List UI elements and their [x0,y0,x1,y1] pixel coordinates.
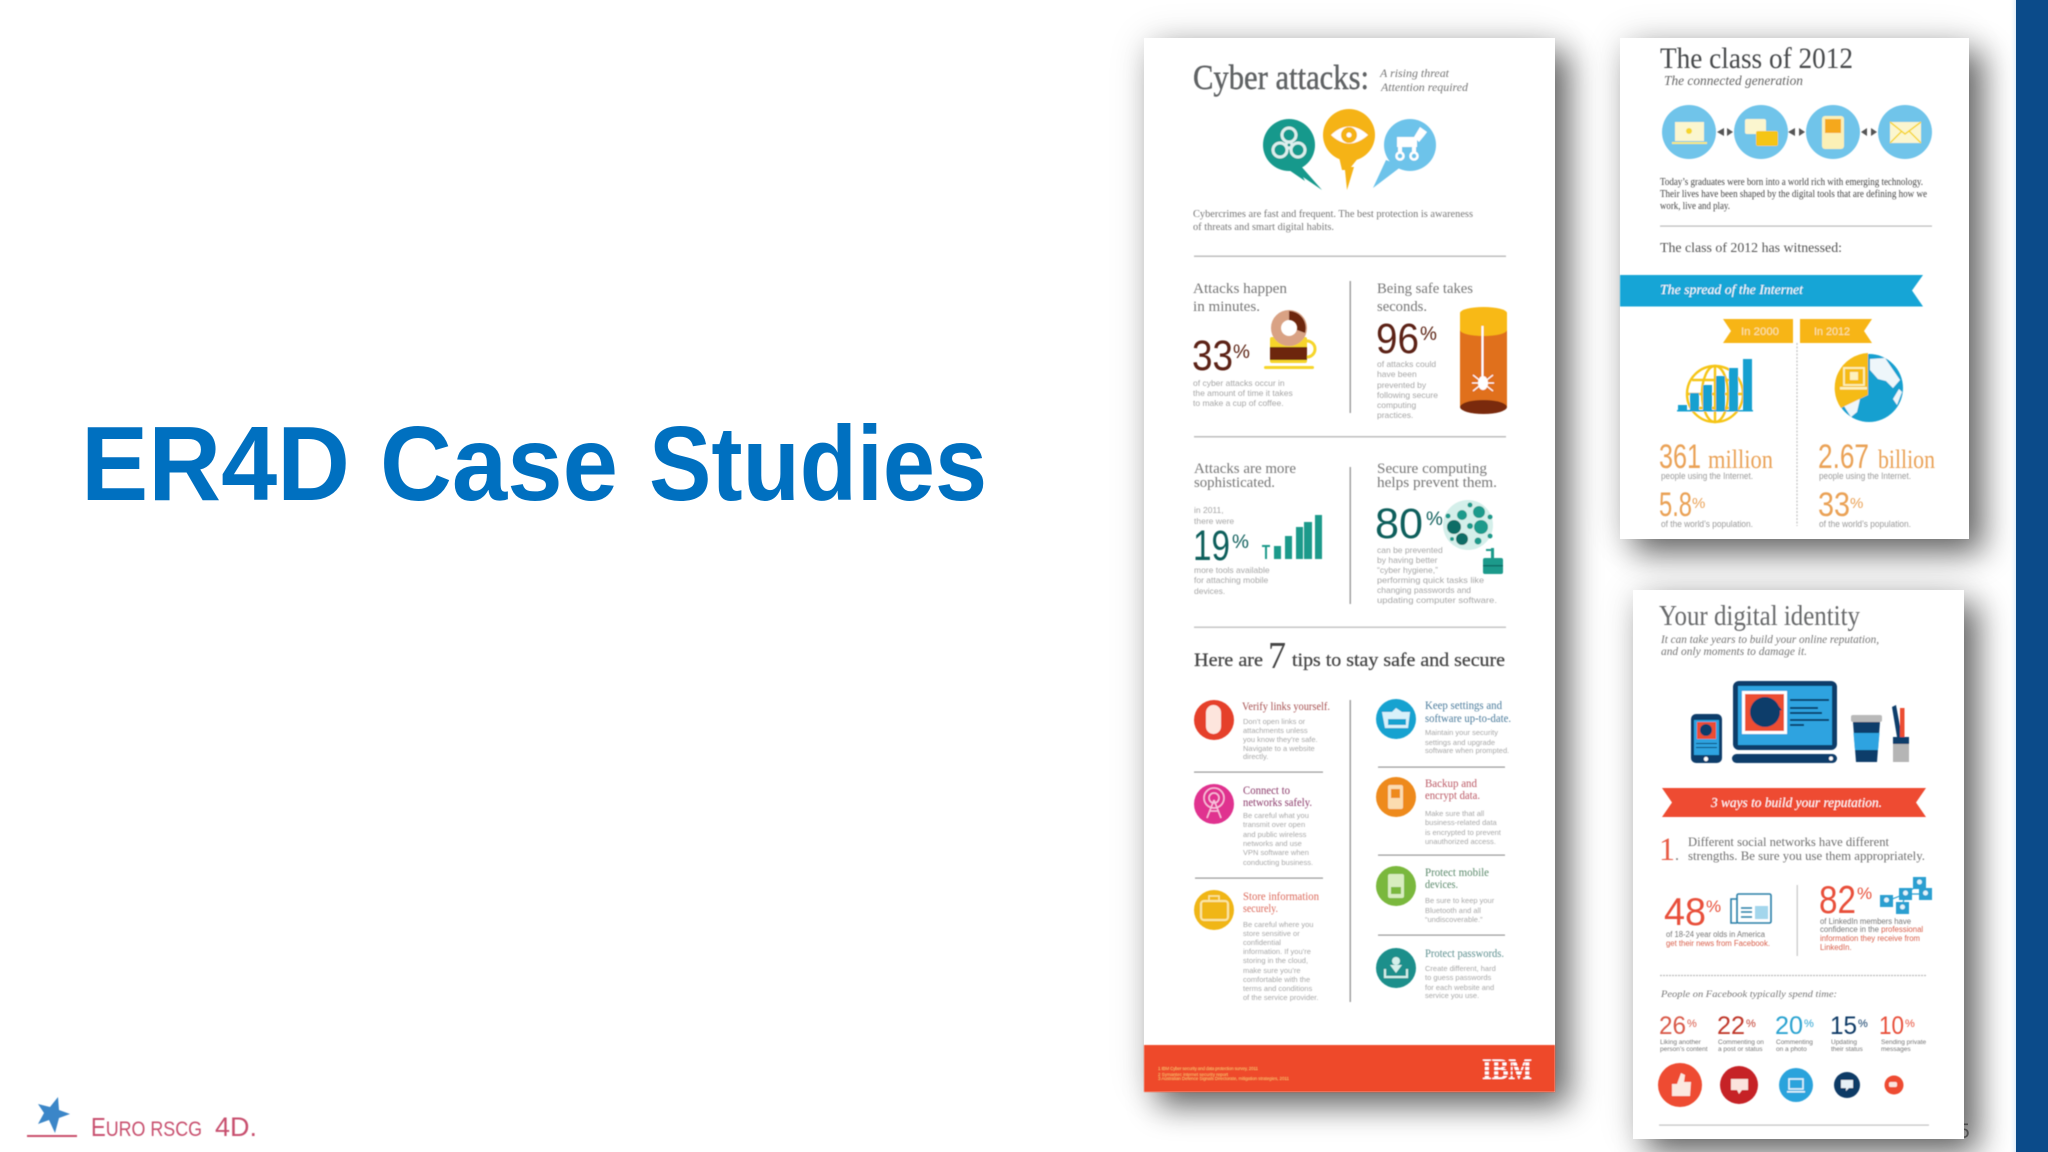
tip: keep settings: software up-to-date. [1425,713,1511,725]
stat: secure computing: changing passwords and [1377,585,1471,595]
subheading: The connected generation [1664,73,1803,88]
icon: globe with bars [1677,359,1753,422]
logo: IBM: IBM [1482,1053,1532,1086]
text: step 1: 1 [1659,832,1675,868]
intro text [1660,177,1927,212]
flag: in 2012: In 2012 [1814,326,1850,338]
text: step 1: . [1675,847,1679,864]
subheading: and only moments to damage it. [1661,646,1807,658]
illustration: devices [1691,681,1909,763]
icon: laptop [1732,681,1837,763]
stat: 361 million: million [1708,445,1773,474]
stat: attacks happen in minutes: the amount of time it takes [1193,388,1293,398]
stat: 2.67 billion [1818,438,1935,529]
tip: store information: storing in the cloud, [1243,956,1308,965]
stat: attacks happen in minutes: 33 [1192,332,1233,380]
stat: 15% updating: % [1858,1018,1868,1030]
tip: verify links: Don’t open links or [1243,717,1306,726]
tip: backup data: unauthorized access. [1425,837,1496,846]
tip: backup data: Backup and [1425,778,1477,790]
heading: seven tips: Here are [1194,650,1263,671]
tip: protect passwords [1376,948,1504,1000]
tip: connect safely: Be careful what you [1243,811,1309,820]
stat: 82%: of LinkedIn members have [1820,917,1911,926]
title: ER4D [81,405,350,523]
stat: 361 million: people using the Internet. [1661,471,1753,481]
stat: attacks happen in minutes: Attacks happen [1193,281,1288,297]
icon: newspaper [1731,894,1771,923]
flag: in 2000 [1723,319,1793,343]
tip: keep settings: Keep settings and [1425,700,1502,712]
text: step 1: strengths. Be sure you use them appropriately. [1688,848,1925,863]
intro text: work, live and play. [1660,201,1730,212]
logo: Euro RSCG 4D [27,1097,257,1142]
icons: connected devices [1662,105,1932,159]
tip: protect passwords: for each website and [1425,983,1494,992]
stat: 82%: confidence in the professional [1820,925,1923,934]
stat: 10% sending: 10 [1879,1012,1904,1040]
stat: 10% sending: messages [1881,1046,1911,1053]
ribbon: 3 ways: 3 ways to build your reputation. [1710,796,1882,811]
stat: 15% updating: 15 [1830,1012,1857,1040]
tip: connect safely: networks and use [1243,839,1302,848]
tip: verify links: attachments unless [1243,726,1308,735]
tip: store information: confidential [1243,938,1281,947]
tip: connect safely: and public wireless [1243,830,1307,839]
icon: coffee cup [1851,715,1882,762]
stat: being safe takes seconds: 96 [1376,315,1419,363]
tip: verify links: directly. [1243,752,1268,761]
tip: verify links: Navigate to a website [1243,744,1315,753]
intro text [1193,209,1473,233]
stat: 20% commenting on photo: on a photo [1776,1046,1807,1053]
tip: store information: comfortable with the [1243,975,1310,984]
stat: 10% sending: Sending private [1881,1039,1927,1046]
icon: pencil cup [1892,705,1909,762]
text: step 1 [1659,832,1925,868]
tip: protect mobile: Protect mobile [1425,867,1489,879]
tip: protect passwords: to guess passwords [1425,973,1492,982]
intro text: Today’s graduates were born into a world rich with emerging technology. [1660,177,1923,188]
right edge blue bar [2009,0,2048,1152]
tip: connect safely: Connect to [1243,785,1290,797]
stat: 10% sending: % [1905,1018,1915,1030]
icon: trojan horse bubble [1373,119,1436,188]
stat: 15% updating: their status [1831,1046,1864,1053]
tip: protect mobile: devices. [1425,879,1458,891]
stat: secure computing: 80 [1375,500,1423,548]
stat: 361 million [1659,438,1773,529]
tip: verify links: you know they’re safe. [1243,735,1318,744]
ribbon: 3 ways [1662,788,1926,817]
stat: 22% commenting: % [1746,1018,1756,1030]
stat: attacks are more sophisticated: for attaching mobile [1194,575,1268,585]
stat: attacks are more sophisticated: more tools available [1194,565,1270,575]
stat: being safe takes seconds: have been [1377,369,1417,379]
tip: connect safely: conducting business. [1243,858,1313,867]
stat: 2.67 billion: people using the Internet. [1819,471,1911,481]
tip: backup data: is encrypted to prevent [1425,828,1502,837]
tip: protect mobile [1376,866,1495,924]
heading: seven tips: 7 [1268,635,1286,677]
stat: being safe takes seconds: Being safe takes [1377,281,1473,297]
tip: keep settings: settings and upgrade [1425,738,1495,747]
stat: 48% [1664,891,1771,948]
footnotes [1158,1066,1289,1081]
icon: earth with laptop [1835,353,1903,422]
stat: secure computing: by having better [1377,555,1438,565]
intro text: Their lives have been shaped by the digital tools that are defining how we [1660,189,1927,200]
stat: 20% commenting on photo: % [1804,1018,1814,1030]
panel: digital identity [1633,590,1964,1139]
stat: 26% liking: Liking another [1660,1039,1702,1046]
stat: secure computing [1375,461,1503,605]
footnotes: 3 Australian Defence Signals Directorate, mitigation strategies, 2011 [1158,1076,1289,1081]
heading: seven tips: tips to stay safe and secure [1292,650,1505,671]
tip: backup data [1376,777,1502,846]
tip: store information: make sure you’re [1243,966,1301,975]
tip: store information: terms and conditions [1243,984,1312,993]
flag: in 2012 [1800,319,1872,343]
stat: 82% [1819,877,1932,952]
subheading: It can take years to build your online reputation, [1660,634,1879,646]
stat: 361 million: 5.8 [1659,486,1692,524]
tip: connect safely: networks safely. [1243,797,1312,809]
stat: 26% liking: 26 [1659,1012,1686,1040]
stat: attacks are more sophisticated: in 2011, [1194,505,1224,515]
stat: 26% liking: % [1687,1018,1697,1030]
icon: briefcase lock [1483,548,1503,574]
text: step 1: Different social networks have different [1688,834,1889,849]
stat: 82%: LinkedIn. [1820,943,1852,952]
stat: being safe takes seconds: following secure [1377,390,1438,400]
tip: keep settings: software when prompted. [1425,746,1509,755]
tip: protect passwords: Create different, hard [1425,964,1496,973]
stat: 2.67 billion: 33 [1818,486,1850,524]
tip: connect safely [1194,784,1313,867]
stat: being safe takes seconds: % [1420,324,1437,345]
tip: keep settings [1376,699,1511,755]
tip: backup data: business-related data [1425,818,1498,827]
stat: 26% liking: person’s content [1660,1046,1708,1053]
tip: backup data: encrypt data. [1425,790,1480,802]
stat: 22% commenting: Commenting on [1718,1039,1764,1046]
stat: 2.67 billion: 2.67 [1818,438,1869,476]
stat: secure computing: performing quick tasks like [1377,575,1484,585]
tip: store information: store sensitive or [1243,929,1300,938]
ribbon: spread of the internet: The spread of the Internet [1660,283,1804,298]
intro text: Cybercrimes are fast and frequent. The best protection is awareness [1193,209,1473,220]
title: Case [380,405,618,523]
icon: cylinder with spider [1460,307,1507,414]
stat: 20% commenting on photo [1775,1012,1814,1102]
heading: class of 2012: The class of 2012 [1660,42,1853,75]
footnotes: 1 IBM Cyber security and data protection survey, 2011 [1158,1066,1258,1071]
stat: secure computing: % [1426,509,1443,530]
stat: attacks are more sophisticated: there were [1194,516,1234,526]
footer band [1144,1045,1555,1092]
panel: cyber attacks [1144,38,1555,1092]
stat: 20% commenting on photo: Commenting [1776,1039,1813,1046]
stat: being safe takes seconds [1376,281,1507,420]
stat: 2.67 billion: billion [1878,445,1935,474]
tip: verify links: Verify links yourself. [1242,701,1330,713]
tip: protect mobile: Be sure to keep your [1425,896,1495,905]
stat: attacks are more sophisticated: sophisticated. [1194,475,1275,491]
stat: 361 million: of the world’s population. [1661,519,1753,529]
footnotes: 2 Symantec internet security report [1158,1072,1229,1077]
stat: attacks happen in minutes: of cyber attacks occur in [1193,378,1285,388]
tip: protect passwords: service you use. [1425,991,1479,1000]
stat: 82%: % [1857,884,1872,903]
stat: being safe takes seconds: of attacks could [1377,359,1436,369]
tip: connect safely: transmit over open [1243,820,1305,829]
stat: attacks happen in minutes: in minutes. [1193,299,1260,315]
tip: keep settings: Maintain your security [1425,728,1498,737]
stat: 48%: % [1706,897,1721,916]
stat: 82%: 82 [1819,879,1856,922]
stat: 22% commenting: a post or status [1718,1046,1763,1053]
stat: 361 million: 361 [1659,438,1701,476]
stat: 2.67 billion: % [1850,495,1863,512]
page number: 5 [1958,1120,1970,1143]
intro text: of threats and smart digital habits. [1193,222,1334,233]
tip: store information: Be careful where you [1243,920,1313,929]
ribbon: spread of the internet [1620,275,1923,306]
stat: secure computing: Secure computing [1377,461,1487,477]
stat: attacks are more sophisticated: 19 [1193,522,1230,570]
title: Studies [649,405,987,523]
icon: people network [1880,877,1932,914]
tip: store information: information. If you’re [1243,947,1311,956]
stat: 20% commenting on photo: 20 [1775,1012,1803,1040]
stat: 361 million: % [1692,495,1705,512]
subheading [1379,68,1468,94]
heading: seven tips [1194,635,1505,677]
stat: 15% updating: Updating [1831,1039,1857,1046]
stat: attacks happen in minutes [1192,281,1315,408]
stat: attacks are more sophisticated: devices. [1194,586,1225,596]
heading: cyber attacks: Cyber attacks: [1193,58,1369,97]
tip: protect passwords: Protect passwords. [1425,948,1504,960]
icon: phone [1691,714,1722,763]
flag: in 2000: In 2000 [1741,326,1779,338]
heading: digital identity: Your digital identity [1659,600,1860,632]
stat: secure computing: can be prevented [1377,545,1443,555]
stat: 48%: get their news from Facebook. [1666,939,1770,948]
tip: connect safely: VPN software when [1243,848,1309,857]
stat: 82%: information they receive from [1820,934,1920,943]
stat: attacks are more sophisticated: % [1232,532,1249,553]
stat: 10% sending [1879,1012,1927,1094]
stat: being safe takes seconds: practices. [1377,410,1413,420]
stat: 48%: of 18-24 year olds in America [1666,930,1766,939]
stat: 22% commenting: 22 [1717,1012,1745,1040]
stat: 15% updating [1830,1012,1868,1098]
stat: 2.67 billion: of the world’s population. [1819,519,1911,529]
stat: secure computing: helps prevent them. [1377,475,1497,491]
text: witnessed: The class of 2012 has witnessed: [1660,241,1842,256]
stat: attacks happen in minutes: % [1233,342,1250,363]
stat: attacks happen in minutes: to make a cup of coffee. [1193,398,1284,408]
text: facebook intro: People on Facebook typically spend time: [1660,990,1837,1000]
subheading: Attention required [1380,82,1468,94]
tip: backup data: Make sure that all [1425,809,1485,818]
stat: attacks are more sophisticated: Attacks are more [1194,461,1296,477]
tip: store information: securely. [1243,903,1278,915]
icon: coffee and donut [1264,311,1315,369]
stat: 48%: 48 [1664,891,1706,934]
stat: secure computing: “cyber hygiene,” [1377,565,1438,575]
tip: store information: of the service provider. [1243,993,1318,1002]
logo: Euro RSCG 4D: 4D. [215,1112,257,1142]
subheading: A rising threat [1379,68,1450,80]
panel: class of 2012 [1620,38,1969,539]
icon: biohazard bubble [1263,119,1322,190]
stat: 26% liking [1658,1012,1708,1107]
stat: being safe takes seconds: prevented by [1377,380,1427,390]
icon: eye bubble [1323,109,1375,190]
tip: verify links [1194,700,1330,761]
subheading [1660,634,1879,658]
tip: protect mobile: Bluetooth and all [1425,906,1481,915]
stat: attacks are more sophisticated [1193,461,1322,596]
title [81,405,987,523]
icon: star [38,1097,70,1133]
tip: store information [1194,890,1319,1002]
tip: store information: Store information [1243,891,1319,903]
stat: being safe takes seconds: seconds. [1377,299,1427,315]
stat: being safe takes seconds: computing [1377,400,1416,410]
chart: rising bars [1262,515,1322,559]
icon: virus cluster [1443,500,1493,550]
logo: Euro RSCG 4D: EURO RSCG [91,1112,202,1142]
tip: protect mobile: “undiscoverable.” [1425,915,1483,924]
stat: 22% commenting [1717,1012,1764,1104]
stat: secure computing: updating computer software. [1377,595,1497,605]
